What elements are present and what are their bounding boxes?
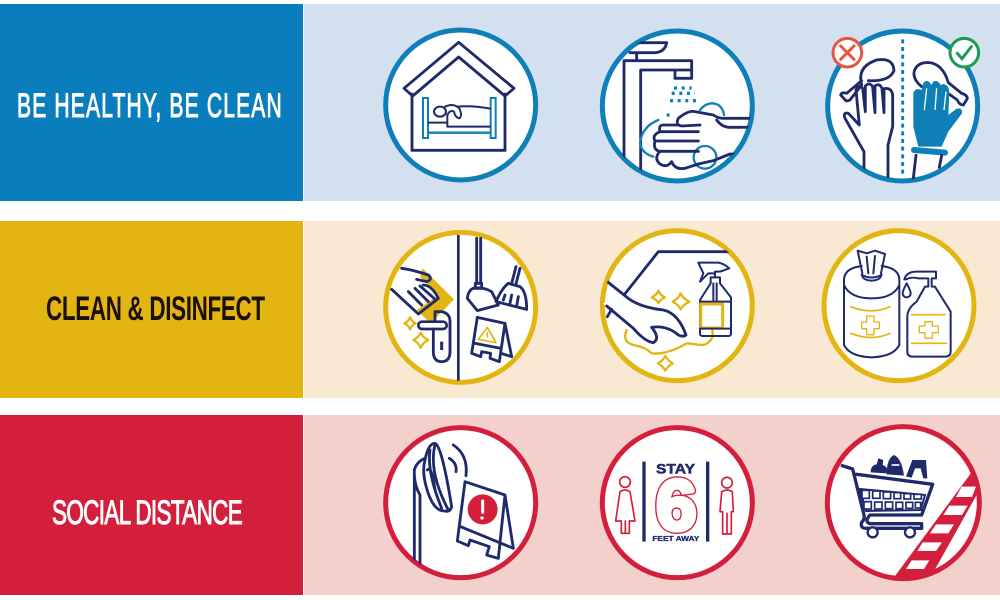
hands [677,111,750,127]
sparkles [652,291,689,371]
faucet [624,43,692,177]
icons row 2 [386,231,974,382]
divider dashed [901,39,904,174]
chicken leg right [914,63,967,105]
heading block: social distance: SOCIAL DISTANCE [52,494,243,532]
figure: man [720,477,733,534]
icon: stay 6 feet away [602,428,752,578]
panel: be healthy, be clean [0,4,1000,201]
icon: wipes and sanitiser [824,231,974,381]
text: feet away: FEET AWAY [652,536,700,543]
panel: clean and disinfect [0,221,1000,398]
hand [604,296,624,306]
wiping hand [392,268,438,314]
bare hand [844,84,893,177]
panel background: cream [304,221,1000,398]
number: 6: 6 [656,466,697,546]
chicken leg left [841,60,894,101]
glove [913,81,962,147]
heading block: clean & disinfect: CLEAN & DISINFECT [46,290,265,328]
heading block: social distance [0,415,303,595]
panel background: light blue [304,4,1000,201]
badge: wrong [833,38,862,67]
icon: gloves no bare hands [828,31,979,181]
heading block: be healthy, be clean [0,4,303,201]
spray bottle [698,263,731,336]
heading block: clean & disinfect [0,221,303,398]
mop and broom handles [477,238,520,285]
cloth [417,268,454,323]
icons row 1 [386,30,979,181]
heading block: be healthy, be clean: BE HEALTHY, BE CLEAN [17,86,282,124]
figure: woman [616,477,635,533]
text: stay: STAY [656,461,695,476]
icon: speaker announcement [386,428,536,578]
groceries [871,455,927,478]
door handle [433,312,450,362]
broom [496,283,527,309]
icon: shopping cart with floor marker [827,427,985,579]
icons row 3 [386,427,985,579]
sanitiser bottle [904,272,951,357]
water drops [667,88,696,115]
icon: wipe surface [602,231,752,381]
panel background: pink [304,415,1000,595]
icon: stay home in bed [386,30,536,180]
number: 6 inner: 6 [656,466,697,546]
sparkles [404,317,428,348]
icon: clean door handle and floor [386,232,536,382]
spill [624,328,714,355]
dustpan [467,283,498,311]
badge: correct [950,38,979,67]
icon: wash hands [602,31,752,181]
floor stripe [895,474,976,576]
panel: social distance [0,415,1000,595]
wet floor sign [472,317,512,362]
cart [842,466,933,528]
soap bubbles [640,120,658,157]
wipes tub [844,266,899,357]
